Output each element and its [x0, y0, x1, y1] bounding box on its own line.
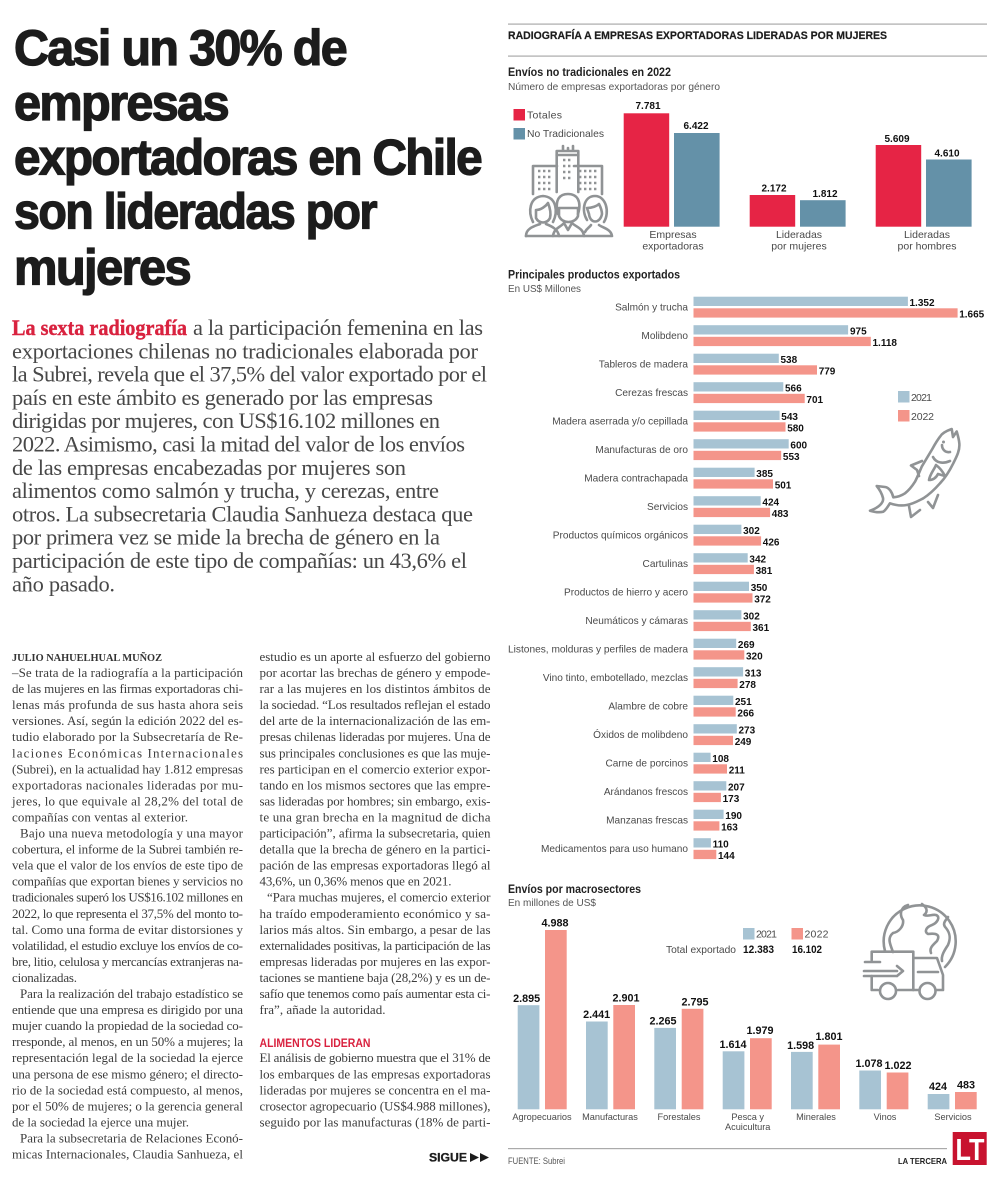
row: cerezas frescas	[615, 382, 824, 406]
row: alambre de cobre	[608, 696, 755, 719]
icon: globe and truck	[864, 904, 956, 999]
row: carne de porcinos: 108	[712, 754, 729, 765]
lead paragraph: año pasado.	[12, 571, 115, 596]
title: Casi un 30% de	[14, 20, 347, 76]
panel: envíos por macrosectores	[508, 884, 977, 1132]
row: neumáticos y cámaras: 302	[743, 611, 760, 622]
group: vinos	[855, 1058, 912, 1122]
row: salmón y trucha	[615, 297, 985, 320]
group: manufacturas	[582, 993, 640, 1122]
lead paragraph: La sexta radiografía	[12, 315, 187, 340]
group: minerales: 1.801	[815, 1031, 843, 1043]
row: servicios: 424	[762, 497, 780, 508]
row: carne de porcinos: Carne de porcinos	[606, 758, 688, 769]
article column 1: tradicionales superó los US$16.102 millones en	[12, 890, 244, 905]
article column 2: “Para muchas mujeres, el comercio exterior	[267, 890, 491, 905]
row: arándanos frescos: 173	[723, 794, 740, 805]
article column 2: te una gran brecha en la magnitud de dicha	[260, 810, 491, 824]
group: manufacturas: 2.441	[583, 1009, 610, 1021]
article column 1: cionalizadas.	[12, 970, 77, 985]
source: FUENTE: Subrei	[508, 1156, 565, 1166]
article column 1: de las mujeres en las firmas exportadoras chi-	[12, 681, 243, 696]
article column 1: vela que el valor de los envíos de este tipo de	[12, 858, 243, 873]
row: manzanas frescas: Manzanas frescas	[606, 815, 688, 826]
article column 2: rar a las mujeres en los distintos ámbitos de	[260, 681, 491, 696]
row: madera aserrada	[552, 411, 804, 434]
lead paragraph: de las empresas encabezadas por mujeres son	[12, 455, 406, 480]
group: pesca y acuicultura: 1.979	[746, 1025, 774, 1037]
bars: lideradas por mujeres	[750, 184, 846, 252]
row: óxidos de molibdeno: 249	[735, 737, 752, 748]
lead paragraph: país en este ámbito es generado por las empresas	[12, 385, 433, 410]
row: listones, molduras y perfiles: 269	[738, 640, 755, 651]
row: productos químicos orgánicos: Productos químicos orgánicos	[553, 530, 688, 541]
row: medicamentos para uso humano	[541, 838, 735, 862]
row: óxidos de molibdeno: 273	[738, 725, 756, 736]
row: cerezas frescas: 701	[806, 395, 824, 406]
article column 2: fra”, añade la autoridad.	[260, 1002, 386, 1017]
row: molibdeno: 1.118	[872, 338, 897, 349]
row: tableros de madera	[599, 354, 836, 377]
group: manufacturas: 2.901	[612, 993, 640, 1005]
row: productos de hierro y acero: Productos de hierro y acero	[564, 587, 688, 598]
lead paragraph: a la participación femenina en las	[193, 315, 483, 340]
article column 2: tando en los mismos sectores que las empre-	[260, 777, 490, 792]
article column 2: larios más altos. Sin embargo, a pesar de las	[260, 922, 490, 937]
byline: JULIO NAHUELHUAL MUÑOZ	[12, 652, 162, 664]
title	[14, 20, 482, 295]
lead paragraph: dirigidas por mujeres, con US$16.102 millones en	[12, 408, 440, 433]
infographic header: RADIOGRAFÍA A EMPRESAS EXPORTADORAS LIDERADAS POR MUJERES	[508, 29, 887, 42]
row: servicios: Servicios	[647, 502, 688, 513]
row: óxidos de molibdeno: Óxidos de molibdeno	[593, 728, 688, 741]
article column 1: jeres, lo que equivale al 28,2% del total de	[11, 793, 243, 808]
row: carne de porcinos	[606, 753, 745, 776]
subheading: alimentos lideran: ALIMENTOS LIDERAN	[260, 1038, 370, 1050]
legend and totals: Total exportado	[666, 944, 736, 956]
article column 2: sas lideradas por hombres; sin embargo, exis-	[260, 793, 490, 808]
bars: lideradas por mujeres: 1.812	[812, 189, 838, 200]
bars: lideradas por hombres: 5.609	[884, 134, 910, 145]
icon: buildings and women	[526, 146, 612, 236]
article column 1: cobertura, el informe de la Subrei también re-	[12, 842, 243, 857]
continuation marker	[429, 1150, 489, 1164]
legend	[514, 109, 604, 140]
row: manzanas frescas: 190	[725, 811, 742, 822]
article column 1: compañías que exportan bienes y servicios no	[12, 874, 243, 889]
group: pesca y acuicultura: Pesca y	[731, 1112, 764, 1122]
article column 2: del arte de la internacionalización de las em-	[260, 713, 490, 728]
brand name: LA TERCERA	[898, 1156, 947, 1166]
group: vinos: Vinos	[874, 1112, 897, 1122]
group: agropecuarios: 4.988	[541, 918, 569, 930]
legend and totals: 12.383	[743, 944, 774, 956]
row: madera contrachapada: 501	[775, 480, 792, 491]
row: listones, molduras y perfiles: Listones, molduras y perfiles de madera	[508, 644, 688, 655]
group: servicios	[928, 1080, 977, 1122]
row: madera aserrada: 543	[781, 412, 798, 423]
row: alambre de cobre: Alambre de cobre	[608, 701, 688, 712]
article column 2: por acortar las brechas de género y empode-	[260, 665, 490, 680]
article column 1: tudio elaborado por la Subsecretaría de Re-	[12, 729, 243, 744]
row: listones, molduras y perfiles	[508, 639, 763, 662]
article column 2: sus principales conclusiones es que las muje-	[260, 745, 490, 760]
bars: lideradas por hombres: 4.610	[934, 148, 960, 160]
row: arándanos frescos	[604, 781, 745, 805]
row: alambre de cobre: 251	[735, 697, 752, 708]
subheading: En US$ Millones	[508, 283, 581, 295]
row: vino tinto: 313	[745, 668, 762, 679]
row: cartulinas: 342	[749, 554, 767, 565]
article column 2: ha traído empoderamiento económico y sa-	[260, 906, 490, 921]
panel: principales productos exportados	[508, 270, 985, 862]
row: manufacturas de oro: Manufacturas de oro	[595, 445, 688, 456]
row: madera aserrada: Madera aserrada y/o cepillada	[552, 416, 688, 427]
article column 2: seguido por las manufacturas (18% de parti-	[260, 1114, 490, 1129]
row: manufacturas de oro	[595, 439, 808, 463]
row: productos de hierro y acero	[564, 582, 771, 605]
title: mujeres	[14, 239, 190, 295]
group: pesca y acuicultura	[719, 1025, 774, 1132]
article column 1: volatilidad, el estudio excluye los envíos de co-	[12, 938, 243, 953]
group: forestales: 2.265	[649, 1016, 677, 1028]
row: madera contrachapada	[584, 468, 792, 491]
group: servicios: 483	[957, 1080, 975, 1092]
article column 1: versiones. Así, según la edición 2022 del es-	[12, 713, 243, 728]
row: molibdeno: Molibdeno	[641, 331, 688, 342]
article column 1: exportadoras nacionales lideradas por mu-	[12, 777, 243, 792]
group: agropecuarios: 2.895	[513, 993, 540, 1005]
row: molibdeno: 975	[850, 326, 867, 337]
row: tableros de madera: 538	[780, 355, 798, 366]
article column 1: laciones Económicas Internacionales	[12, 745, 243, 760]
lead paragraph: 2022. Asimismo, casi la mitad del valor de los envíos	[12, 432, 465, 456]
row: productos de hierro y acero: 350	[751, 583, 768, 594]
lead paragraph: exportaciones chilenas no tradicionales elaborada por	[12, 338, 478, 363]
row: madera contrachapada: 385	[756, 469, 773, 480]
row: manzanas frescas	[606, 810, 742, 833]
heading: Envíos por macrosectores	[508, 884, 641, 896]
article column 2: estudio es un aporte al esfuerzo del gobierno	[260, 649, 490, 664]
bars: empresas exportadoras: 6.422	[683, 121, 709, 132]
row: listones, molduras y perfiles: 320	[746, 651, 763, 662]
article column 1: rio de la sociedad está compuesto, al menos,	[12, 1082, 243, 1097]
row: arándanos frescos: 207	[728, 782, 745, 793]
bars: lideradas por mujeres: Lideradas	[776, 229, 822, 241]
row: manzanas frescas: 163	[721, 822, 738, 833]
row: cartulinas	[643, 553, 773, 577]
legend: Totales	[527, 110, 562, 122]
article column 1: Para la subsecretaria de Relaciones Econó-	[20, 1130, 243, 1146]
row: neumáticos y cámaras: Neumáticos y cámaras	[585, 616, 688, 627]
row: vino tinto	[543, 667, 762, 691]
row: cartulinas: 381	[756, 566, 773, 577]
logo: LT	[956, 1132, 985, 1167]
article column 1: 2022, lo que representa el 37,5% del monto to-	[12, 906, 243, 921]
article column 1: por el 50% de mujeres; o la gerencia general	[12, 1098, 243, 1113]
group: minerales: 1.598	[787, 1040, 814, 1052]
row: madera contrachapada: Madera contrachapada	[584, 473, 688, 484]
row: madera aserrada: 580	[787, 423, 804, 434]
subheading: En millones de US$	[508, 897, 596, 909]
continuation marker: SIGUE	[429, 1150, 467, 1164]
row: productos de hierro y acero: 372	[754, 594, 771, 605]
article column 1: –Se trata de la radiografía a la participación	[11, 665, 244, 680]
row: cartulinas: Cartulinas	[643, 559, 688, 570]
group: vinos: 1.078	[855, 1058, 883, 1070]
article column 2: participación”, afirma la subsecretaria, quien	[260, 826, 491, 840]
subheading: Número de empresas exportadoras por género	[508, 81, 720, 93]
article column 2: crosector agropecuario (US$4.988 millones),	[260, 1098, 490, 1113]
legend: No Tradicionales	[527, 128, 604, 140]
row: manufacturas de oro: 600	[790, 440, 808, 451]
group: pesca y acuicultura: Acuicultura	[725, 1122, 771, 1132]
bars: empresas exportadoras: 7.781	[635, 101, 661, 112]
article column 2: 43,6%, un 0,36% menos que en 2021.	[260, 874, 452, 889]
bars: lideradas por mujeres: 2.172	[761, 184, 787, 194]
row: tableros de madera: 779	[819, 366, 836, 377]
group: forestales: Forestales	[658, 1112, 701, 1122]
legend: 2021	[911, 392, 932, 404]
panel: envíos no tradicionales	[508, 67, 972, 252]
row: medicamentos para uso humano: Medicamentos para uso humano	[541, 844, 688, 855]
article column 2: pación de las empresas exportadoras llegó al	[260, 858, 491, 873]
row: productos químicos orgánicos: 302	[743, 526, 760, 537]
lead paragraph: otros. La subsecretaria Claudia Sanhueza destaca que	[12, 501, 473, 526]
legend and totals: 16.102	[792, 944, 822, 956]
article column 2: res participan en el comercio exterior expor-	[260, 761, 490, 776]
row: vino tinto: 278	[739, 680, 756, 691]
row: salmón y trucha: Salmón y trucha	[615, 302, 688, 313]
bars: lideradas por hombres: Lideradas	[904, 229, 950, 241]
group: minerales: Minerales	[796, 1112, 836, 1122]
row: productos químicos orgánicos	[553, 525, 780, 548]
article column 1: tal. Como una forma de evitar distorsiones y	[12, 922, 244, 937]
article column 1: compañías con ventas al exterior.	[12, 810, 188, 824]
row: tableros de madera: Tableros de madera	[599, 359, 688, 370]
lead paragraph: alimentos como salmón y trucha, y cerezas, entre	[12, 478, 439, 503]
title: empresas	[14, 75, 228, 131]
row: óxidos de molibdeno	[593, 724, 756, 748]
article column 1: (Subrei), en la actualidad hay 1.812 empresas	[12, 761, 243, 776]
legend: 2022	[911, 411, 934, 423]
article column 1	[11, 652, 244, 1162]
row: medicamentos para uso humano: 110	[713, 839, 729, 850]
article column 1: una persona de ese mismo género; el directo-	[12, 1066, 243, 1081]
group: agropecuarios: Agropecuarios	[512, 1112, 572, 1122]
group: vinos: 1.022	[884, 1060, 912, 1072]
icon: salmon	[870, 429, 959, 517]
article column 1: bre, litio, celulosa y mercancías extranjeras na-	[12, 954, 243, 969]
article column 1: mujer cuando la propiedad de la sociedad co-	[12, 1018, 243, 1033]
row: cerezas frescas: 566	[785, 383, 802, 394]
title: exportadoras en Chile	[14, 129, 482, 185]
article column 1: Para la realización del trabajo estadístico se	[20, 986, 243, 1001]
bars: empresas exportadoras: exportadoras	[642, 240, 704, 252]
article column 2: presas chilenas lideradas por mujeres. Una de	[260, 729, 491, 744]
bars: empresas exportadoras: Empresas	[649, 229, 697, 241]
article column 2: lideradas por mujeres se concentra en el ma-	[260, 1082, 490, 1097]
group: forestales: 2.795	[681, 997, 709, 1009]
group: pesca y acuicultura: 1.614	[719, 1039, 747, 1051]
heading: Envíos no tradicionales en 2022	[508, 67, 671, 79]
legend	[898, 391, 934, 423]
row: neumáticos y cámaras	[585, 610, 770, 634]
article column 1: micas Internacionales, Claudia Sanhueza, el	[12, 1146, 243, 1162]
article column 2: la sociedad. “Los resultados reflejan el estado	[260, 697, 490, 712]
heading: Principales productos exportados	[508, 270, 680, 282]
group: forestales	[649, 997, 709, 1122]
article column 1: entiende que una empresa es dirigido por una	[12, 1002, 243, 1017]
row: salmón y trucha: 1.665	[959, 309, 985, 320]
lead paragraph: la Subrei, revela que el 37,5% del valor exportado por el	[12, 362, 487, 387]
row: alambre de cobre: 266	[737, 708, 755, 719]
article column 2: los embarques de las empresas exportadoras	[260, 1066, 490, 1081]
row: manufacturas de oro: 553	[783, 452, 800, 463]
article column 2: El análisis de gobierno muestra que el 31% de	[260, 1050, 491, 1065]
article column 2: detalla que la brecha de género en la partici-	[260, 842, 490, 857]
article column 1: Bajo una nueva metodología y una mayor	[20, 826, 244, 840]
article column 2	[260, 649, 491, 1129]
article column 1: de la sociedad la ejerce una mujer.	[12, 1114, 189, 1129]
row: neumáticos y cámaras: 361	[752, 623, 770, 634]
legend and totals: 2021	[756, 928, 777, 940]
article column 2: safío que tenemos como país aumentar esta ci-	[260, 986, 490, 1001]
lead paragraph: por primera vez se mide la brecha de género en la	[12, 525, 440, 550]
row: vino tinto: Vino tinto, embotellado, mezclas	[543, 673, 688, 684]
row: medicamentos para uso humano: 144	[718, 851, 735, 862]
lead paragraph	[12, 315, 487, 596]
row: carne de porcinos: 211	[729, 765, 745, 776]
article column 1: rresponde, al menos, en un 50% a mujeres; la	[12, 1034, 243, 1049]
row: arándanos frescos: Arándanos frescos	[604, 787, 688, 798]
row: servicios	[647, 496, 789, 520]
row: productos químicos orgánicos: 426	[763, 537, 780, 548]
bars: lideradas por hombres	[876, 134, 972, 252]
legend and totals: 2022	[804, 928, 829, 940]
article column 2: externalidades positivas, la participación de las	[260, 938, 490, 953]
article column 1: representación legal de la sociedad la ejerce	[12, 1050, 243, 1065]
row: servicios: 483	[772, 509, 789, 520]
article column 1: lenas más profunda de sus hasta ahora seis	[12, 697, 243, 712]
group: servicios: Servicios	[934, 1112, 972, 1122]
lead paragraph: participación de este tipo de compañías: un 43,6% el	[12, 548, 467, 573]
group: servicios: 424	[929, 1081, 947, 1093]
legend and totals	[666, 928, 829, 956]
row: cerezas frescas: Cerezas frescas	[615, 388, 688, 399]
bars: lideradas por mujeres: por mujeres	[771, 240, 827, 252]
article column 2: taciones se mantiene baja (28,2%) y es un de-	[260, 970, 490, 985]
bars: lideradas por hombres: por hombres	[898, 240, 956, 252]
group: minerales	[787, 1031, 843, 1122]
row: molibdeno	[641, 325, 897, 349]
title: son lideradas por	[14, 183, 377, 239]
group: agropecuarios	[512, 918, 572, 1122]
row: salmón y trucha: 1.352	[910, 298, 935, 309]
footer	[508, 1132, 987, 1167]
group: manufacturas: Manufacturas	[582, 1112, 638, 1122]
article column 2: empresas lideradas por mujeres en las expor-	[260, 954, 490, 969]
bars: empresas exportadoras	[624, 101, 720, 252]
